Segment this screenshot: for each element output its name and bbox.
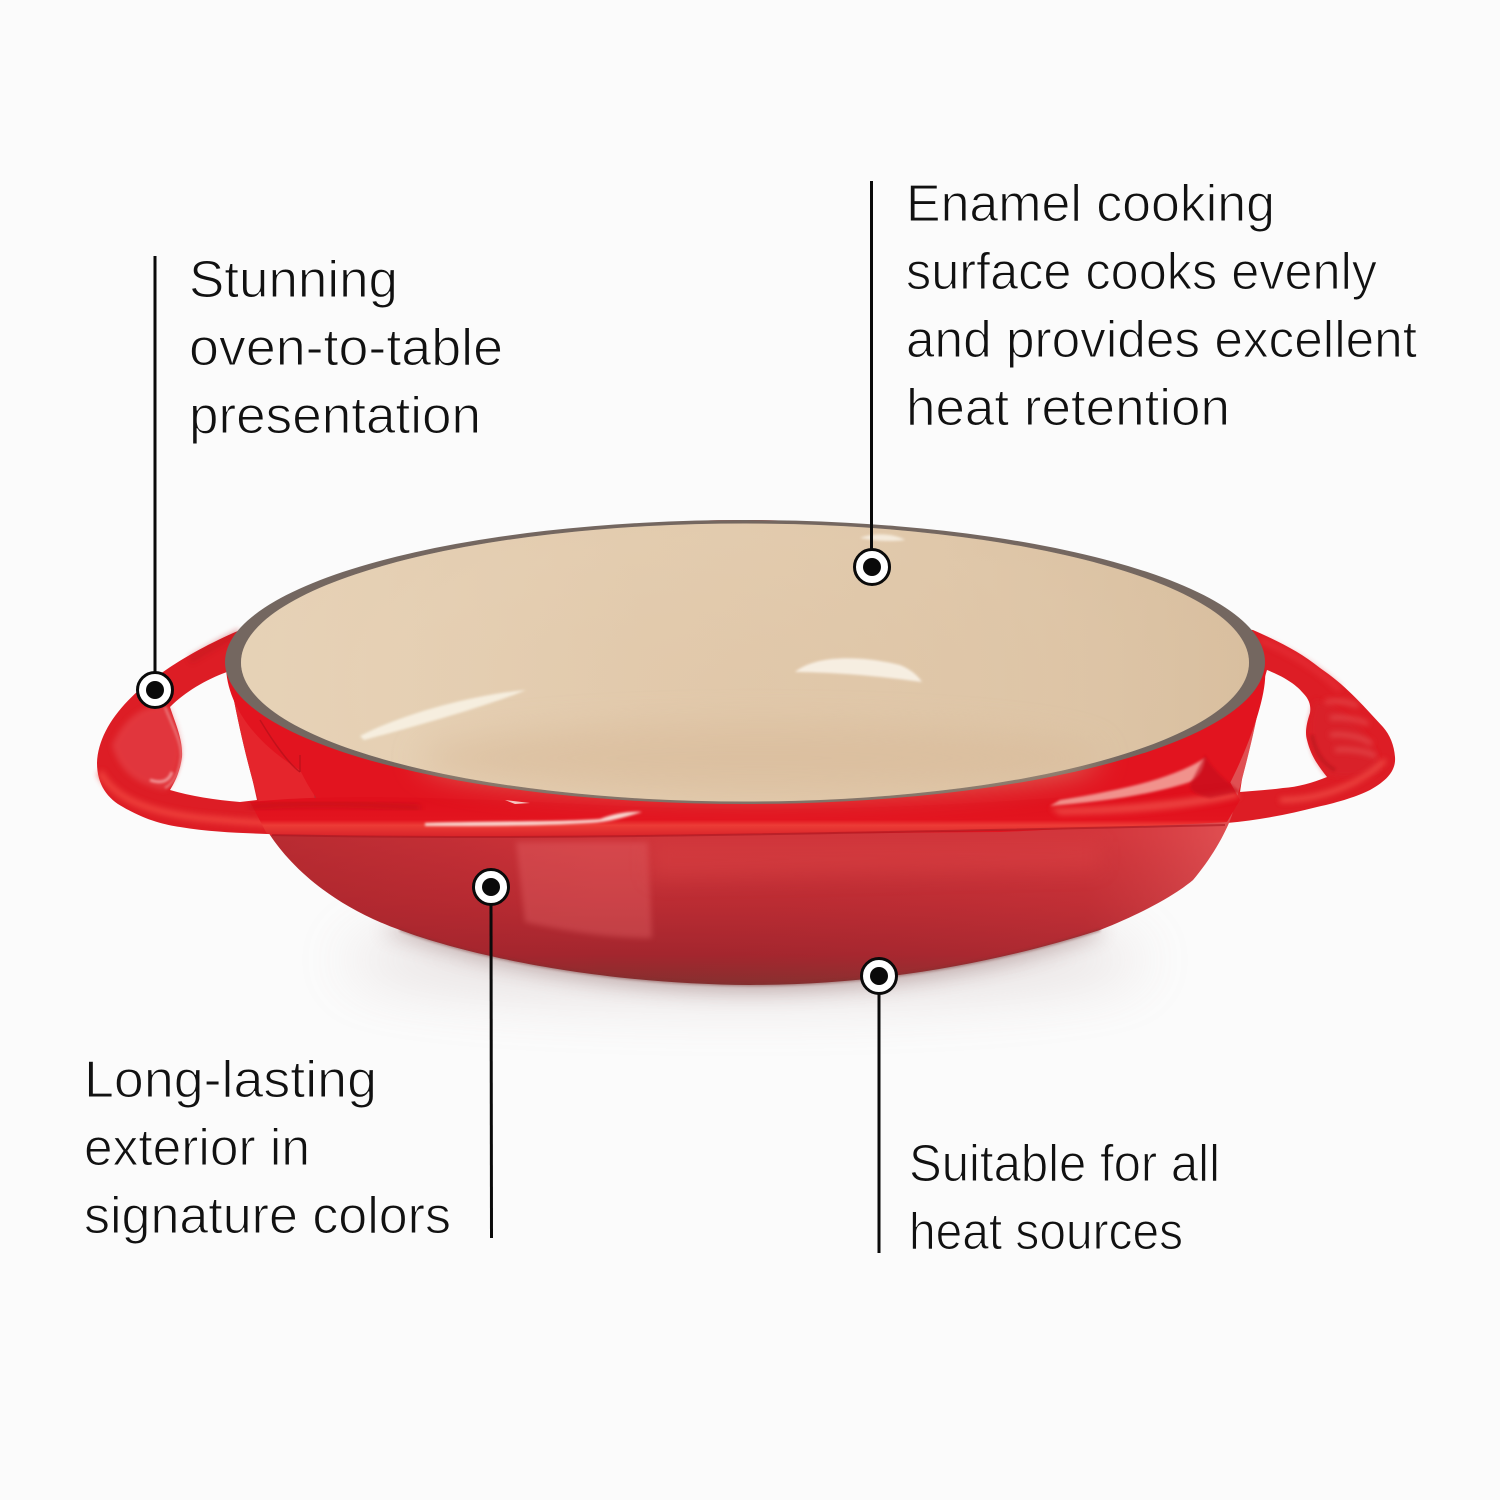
callout: all heat sources <box>862 958 1220 1261</box>
text <box>189 251 503 445</box>
leader line <box>490 903 493 1238</box>
text: heat sources <box>909 1203 1183 1261</box>
text <box>909 1135 1220 1261</box>
text: heat retention <box>906 379 1230 437</box>
soft floor shadow <box>345 924 1145 996</box>
interior highlights <box>360 690 526 740</box>
pan body exterior <box>234 700 1257 985</box>
marker <box>138 672 172 708</box>
text: presentation <box>189 387 481 445</box>
text: surface cooks evenly <box>906 243 1377 301</box>
leader line <box>870 181 873 551</box>
right handle highlight <box>1260 640 1385 800</box>
text <box>906 175 1418 437</box>
leader line <box>154 256 156 674</box>
leader line <box>878 992 880 1253</box>
text: Long-lasting <box>84 1051 377 1109</box>
marker <box>854 550 890 584</box>
photo: red enameled round dish with handles <box>97 520 1395 996</box>
text: Suitable for all <box>909 1135 1220 1193</box>
callout: oven-to-table presentation <box>138 251 503 708</box>
text: Enamel cooking <box>906 175 1275 233</box>
text: and provides excellent <box>906 311 1418 369</box>
rim red lip <box>226 520 1265 836</box>
grey rim edge <box>225 520 1265 804</box>
marker <box>862 958 896 994</box>
band shine <box>250 720 1240 826</box>
flange front band <box>250 782 1240 837</box>
text: oven-to-table <box>189 319 503 377</box>
text: exterior in <box>84 1119 310 1177</box>
cream enamel interior <box>241 524 1249 802</box>
text <box>84 1051 451 1245</box>
left handle highlight <box>100 632 340 825</box>
text: Stunning <box>189 251 398 309</box>
handles and flange <box>97 600 1395 837</box>
body seam under band <box>272 825 1225 837</box>
callout: long-lasting exterior <box>84 870 508 1245</box>
callout: enamel cooking surface <box>854 175 1418 584</box>
pan bottom edge <box>400 930 1100 985</box>
text: signature colors <box>84 1187 451 1245</box>
marker <box>474 870 508 904</box>
